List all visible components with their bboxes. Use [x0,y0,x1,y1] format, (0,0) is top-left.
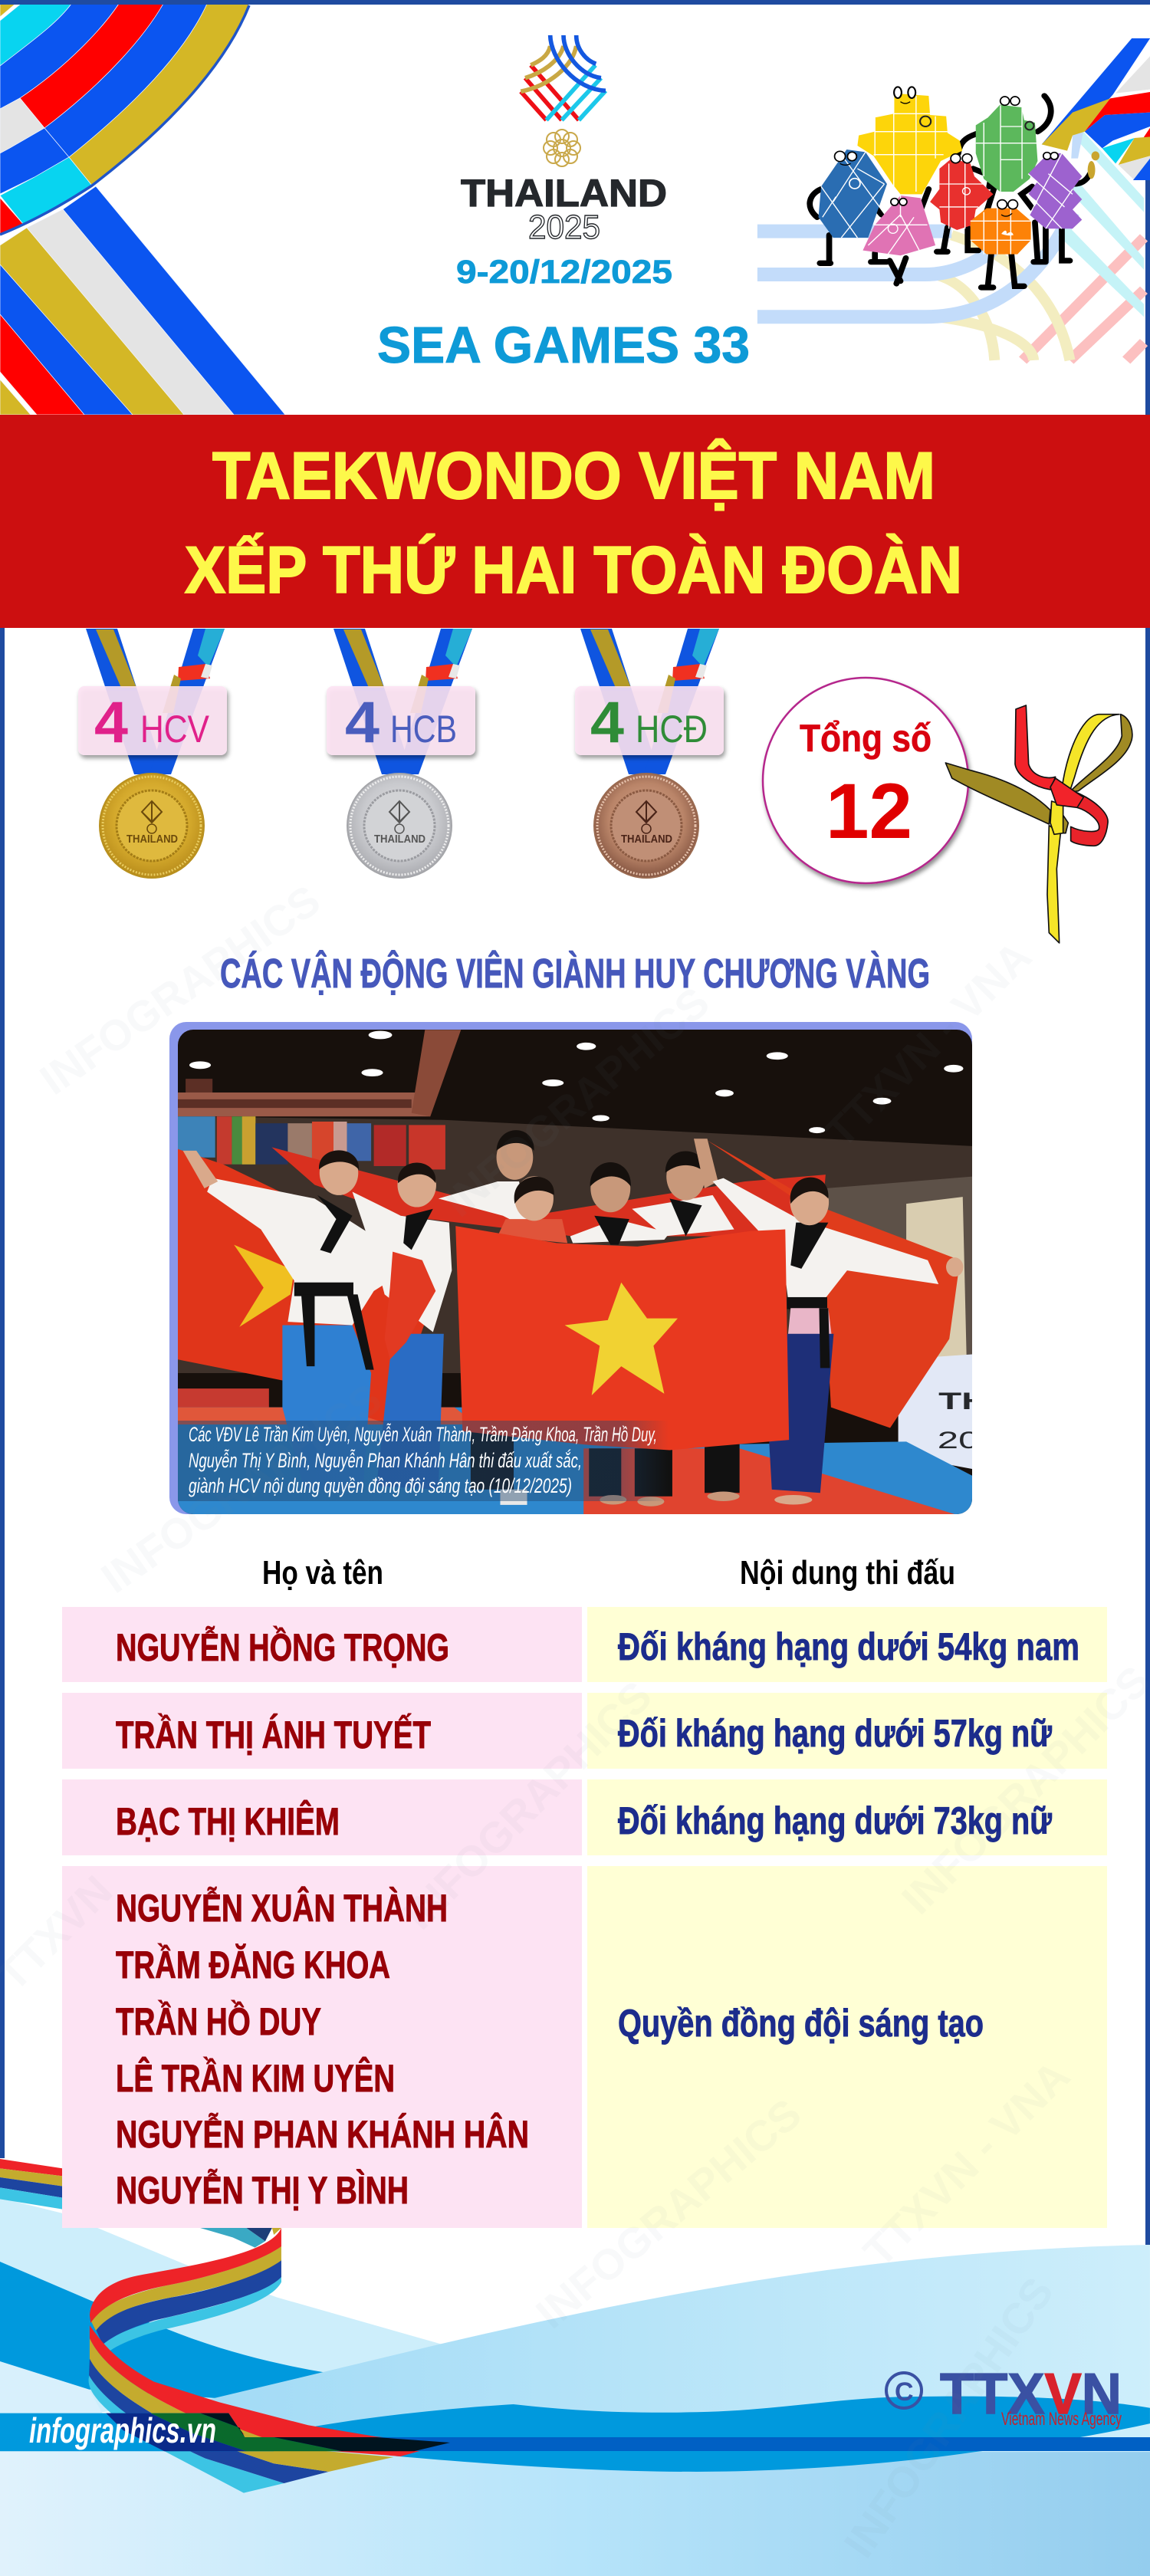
total label: Tổng số [800,717,932,760]
table row 4: NGUYỄN THỊ Y BÌNH [116,2169,409,2212]
small flag fold [385,1252,435,1359]
ceiling truss [178,1092,430,1116]
medal: gold [78,629,227,878]
athlete 4 [498,1219,567,1243]
watermarks: INFOGRAPHICS [834,2269,1063,2566]
title banner [0,415,1150,628]
watermarks [0,876,1150,2566]
table row 2: Đối kháng hạng dưới 57kg nữ [618,1712,1053,1755]
table row 4 [62,1866,1107,2228]
flag: right [708,1140,960,1428]
watermarks: INFOGRAPHICS [93,1374,390,1602]
title line 1: TAEKWONDO VIỆT NAM [212,439,935,513]
medal: bronze: THAILAND [621,833,672,846]
ribbon: top-left piece [0,2159,63,2210]
table row 4: LÊ TRẦN KIM UYÊN [116,2057,395,2100]
athlete 5 [570,1222,667,1244]
ribbon knot icon [945,705,1132,943]
photo caption: Các VĐV Lê Trần Kim Uyên, Nguyễn Xuân Thành, Trầm Đăng Khoa, Trần Hồ Duy, [189,1422,657,1446]
event name: SEA GAMES 33 [377,317,750,374]
photo caption [189,1422,657,1497]
logo: Thailand 2025 [461,35,667,246]
mascot: orange [971,200,1031,255]
logo mark [521,35,606,120]
banners and sign [906,1197,967,1359]
label: 4 HCĐ: 4 [590,690,624,755]
medal: silver [327,629,475,878]
TTXVN wordmark: TTXVN [940,2361,1122,2426]
medal: bronze [575,629,724,878]
mascot: pink [863,196,935,255]
table row 4: Quyền đồng đội sáng tạo [618,2002,984,2045]
total medals circle [763,678,968,883]
country flags [178,1116,215,1158]
athlete 3: back [439,1181,527,1219]
table column headers: Nội dung thi đấu [740,1554,955,1592]
wave and dark wave [209,2245,1150,2472]
ribbon: curl behind table [200,2228,281,2248]
copyright mark: C [895,2377,914,2407]
mascot: red [930,154,994,230]
date: 9-20/12/2025 [456,254,672,291]
ceiling lights [189,1031,963,1133]
watermarks: INFOGRAPHICS [435,978,718,1226]
label: 4 HCB: 4 [345,690,380,755]
flag: left [178,1149,435,1424]
athlete 6 [632,1195,734,1236]
bottom wave background [0,2159,1150,2576]
medal: bronze: HCĐ [636,708,708,751]
mascot legs and arms [810,96,1090,288]
footer bar left [0,2413,274,2451]
table row 4: NGUYỄN PHAN KHÁNH HÂN [116,2113,529,2156]
ribbon overlay on bar [106,2413,450,2451]
photo caption: Nguyễn Thị Y Bình, Nguyễn Phan Khánh Hân thi đấu xuất sắc, [189,1448,582,1472]
table row 2 [62,1693,1107,1769]
logo flower [544,130,580,166]
table row 3: BẠC THỊ KHIÊM [116,1800,340,1843]
footer bar right [245,2437,1150,2451]
table row 2: TRẦN THỊ ÁNH TUYẾT [116,1714,431,1756]
photo: athletes with flags: THAI [938,1388,1027,1414]
ribbon: swirl [89,2228,450,2493]
mascot: yellow [857,87,962,194]
copyright mark [886,2373,922,2408]
logo year: 2025 [528,209,600,246]
medal: silver: HCB [390,708,457,751]
label: 4 HCV [78,686,227,755]
medal: silver: THAILAND [374,833,426,846]
photo: athletes with flags [169,1022,972,1514]
table column headers: Họ và tên [262,1554,383,1592]
photo caption background [178,1421,669,1501]
table row 1 [62,1607,1107,1682]
table row 1: NGUYỄN HỒNG TRỌNG [116,1626,449,1669]
watermarks: INFOGRAPHICS [31,876,329,1104]
TTXVN logo [886,2361,1122,2430]
table row 4: NGUYỄN XUÂN THÀNH [116,1887,448,1930]
medal: gold: THAILAND [127,833,178,846]
medal: gold: 4 [94,690,128,755]
mascot: purple [1028,151,1099,228]
flag: back [271,1147,826,1236]
watermarks: TTXVN - VNA [816,932,1040,1156]
mascot: green [976,97,1037,192]
legs under flag [589,1448,621,1497]
table row 4: TRẦN HỒ DUY [116,2000,321,2043]
athlete 7 [713,1178,938,1298]
floor [178,1388,269,1408]
pale band and blue stripe [0,2198,443,2413]
mascot: blue [819,150,887,238]
watermarks: TTXVN - VNA [854,2051,1079,2275]
athlete 1 [282,1325,371,1424]
website label: infographics.vn [29,2410,216,2450]
table column headers [262,1554,955,1592]
table row 4: TRẦM ĐĂNG KHOA [116,1944,390,1986]
ribbon [0,2159,450,2493]
watermarks: INFOGRAPHICS [394,1671,661,1938]
logo wordmark: THAILAND [461,172,667,215]
total number: 12 [826,767,912,855]
table row 3: Đối kháng hạng dưới 73kg nữ [618,1799,1053,1842]
photo: athletes with flags: 2025 [938,1427,1021,1454]
title line 2: XẾP THỨ HAI TOÀN ĐOÀN [185,534,962,607]
photo caption: giành HCV nội dung quyền đồng đội sáng tạo (10/12/2025) [189,1474,572,1497]
table row 3 [62,1779,1107,1855]
decoration: top-right ribbons and pale lines [757,38,1150,360]
watermarks: INFOGRAPHICS [527,2089,810,2338]
athlete 2 [376,1334,444,1490]
flag: front centre [455,1226,789,1450]
medal: gold: HCV [140,708,210,751]
decoration: top-left ribbons [0,4,285,415]
mascots [810,87,1099,288]
